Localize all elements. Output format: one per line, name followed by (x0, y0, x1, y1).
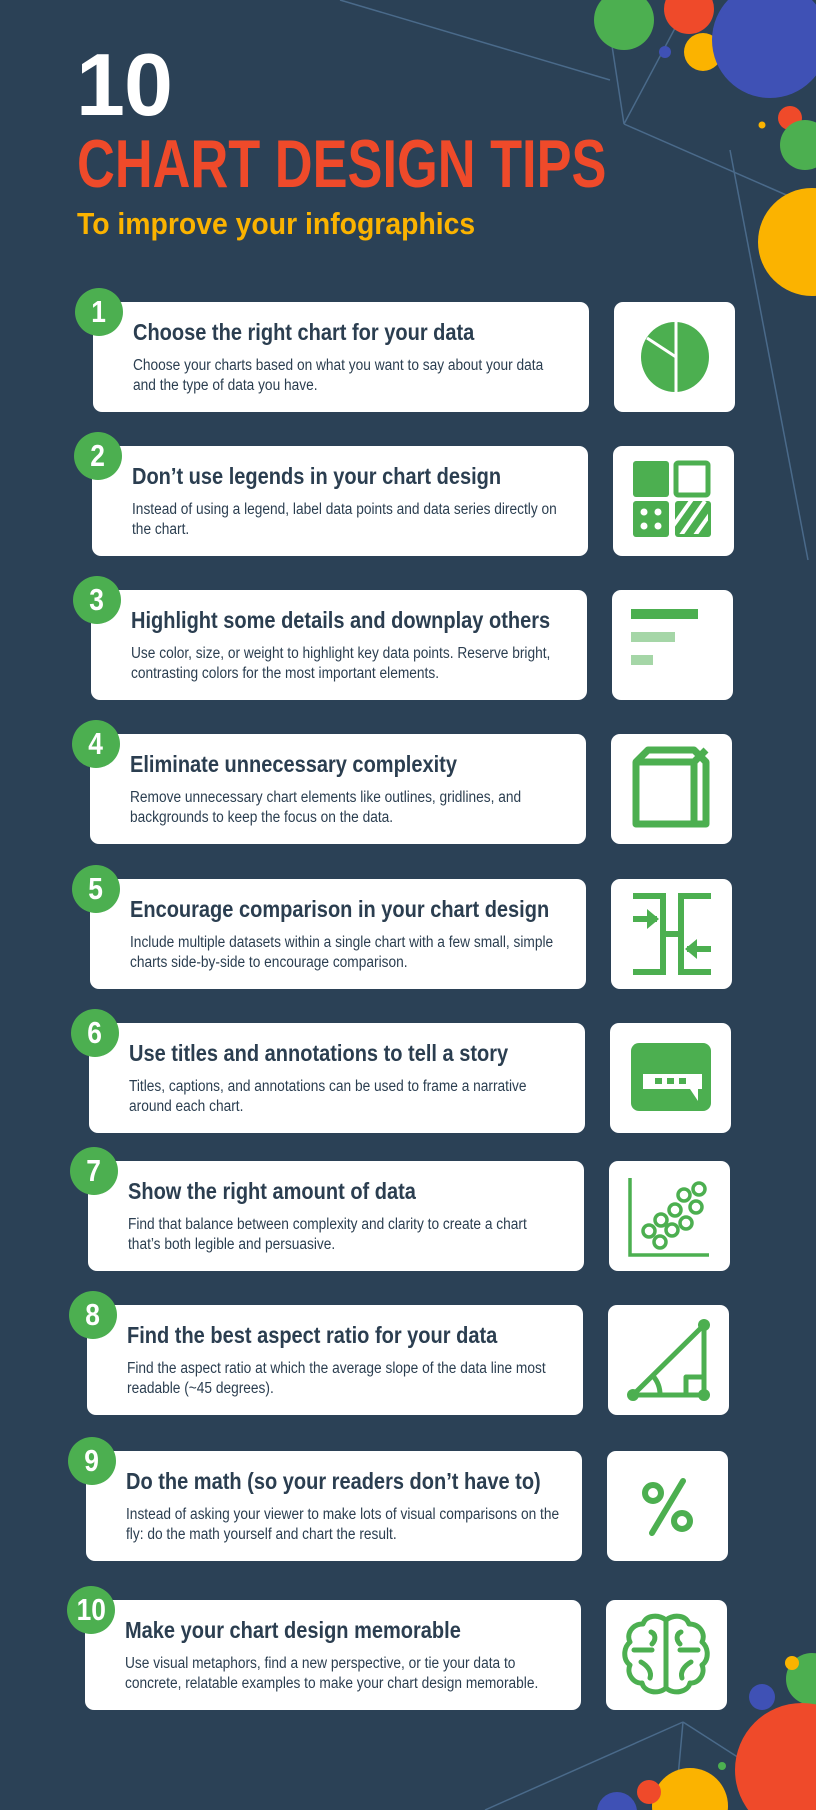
tip 7 card: Find that balance between complexity and clarity to create a chart that’s both legible and persuasive. (128, 1216, 527, 1252)
tip 5 card (90, 879, 586, 989)
tip 5 number (72, 865, 120, 913)
tip 6 number: 6 (88, 1015, 102, 1050)
title: chart design tips: CHART DESIGN TIPS (77, 126, 606, 202)
tip 1 number: 1 (92, 294, 106, 329)
tip 9 number: 9 (85, 1443, 99, 1478)
tip 5 number: 5 (89, 871, 103, 906)
icon: brain (606, 1600, 727, 1710)
tip 1 card: Choose the right chart for your data (133, 319, 474, 345)
tip 6 card (89, 1023, 585, 1133)
tip 2 card: Instead of using a legend, label data points and data series directly on the chart. (132, 501, 557, 538)
tip 6 card: Titles, captions, and annotations can be used to frame a narrative around each chart. (129, 1078, 527, 1114)
tip 7 number: 7 (87, 1153, 101, 1188)
tip 9 card: Do the math (so your readers don’t have to) (126, 1468, 541, 1494)
tip 10 card (85, 1600, 581, 1710)
tip 8 card: Find the aspect ratio at which the average slope of the data line most readable (~45 degrees). (127, 1360, 546, 1396)
icon: pie chart (614, 302, 735, 412)
tip 9 card: Instead of asking your viewer to make lots of visual comparisons on the fly: do the math yourself and chart the result. (126, 1506, 559, 1542)
icon: cube (611, 734, 732, 844)
tip 4 card: Remove unnecessary chart elements like outlines, gridlines, and backgrounds to keep the focus on the data. (130, 789, 521, 826)
tip 7 card (88, 1161, 584, 1271)
tip 3 number (73, 576, 121, 624)
tip 8 number (69, 1291, 117, 1339)
tip 3 number: 3 (90, 582, 104, 617)
tip 10 card: Use visual metaphors, find a new perspective, or tie your data to concrete, relatable examples to make your chart design memorable. (125, 1655, 538, 1692)
icon: highlighted bars (612, 590, 733, 700)
tip 3 card: Highlight some details and downplay others (131, 607, 550, 633)
tip 5 card: Encourage comparison in your chart design (130, 896, 549, 922)
tip 2 number: 2 (91, 438, 105, 473)
icon: scatter plot (609, 1161, 730, 1271)
tip 3 card: Use color, size, or weight to highlight key data points. Reserve bright, contrasting colors for the most important elements. (131, 645, 550, 682)
tip 9 number (68, 1437, 116, 1485)
tip 5 card: Include multiple datasets within a single chart with a few small, simple charts side-by-side to encourage comparison. (130, 934, 553, 970)
icon: comparison arrows (611, 879, 732, 989)
icon: legend grid (613, 446, 734, 556)
tip 1 number (75, 288, 123, 336)
tip 4 number (72, 720, 120, 768)
tip 10 number (67, 1586, 115, 1634)
icon: speech bubble (610, 1023, 731, 1133)
tip 6 card: Use titles and annotations to tell a story (129, 1040, 508, 1066)
tip 2 card: Don’t use legends in your chart design (132, 463, 501, 489)
tip 1 card (93, 302, 589, 412)
tip 10 card: Make your chart design memorable (125, 1617, 461, 1643)
icon: percent (607, 1451, 728, 1561)
tip 2 card (92, 446, 588, 556)
tip 1 card: Choose your charts based on what you want to say about your data and the type of data you have. (133, 357, 543, 394)
tip 9 card (86, 1451, 582, 1561)
tip 4 card (90, 734, 586, 844)
tip 7 number (70, 1147, 118, 1195)
tip 4 card: Eliminate unnecessary complexity (130, 751, 457, 777)
tip 7 card: Show the right amount of data (128, 1178, 416, 1204)
tip 6 number (71, 1009, 119, 1057)
title: 10: 10 (76, 35, 172, 134)
subtitle: To improve your infographics (77, 206, 475, 241)
tip 3 card (91, 590, 587, 700)
icon: right triangle (608, 1305, 729, 1415)
tip 10 number: 10 (76, 1592, 106, 1627)
tip 8 number: 8 (86, 1297, 100, 1332)
tip 4 number: 4 (89, 726, 103, 761)
tip 8 card: Find the best aspect ratio for your data (127, 1322, 497, 1348)
tip 8 card (87, 1305, 583, 1415)
tip 2 number (74, 432, 122, 480)
